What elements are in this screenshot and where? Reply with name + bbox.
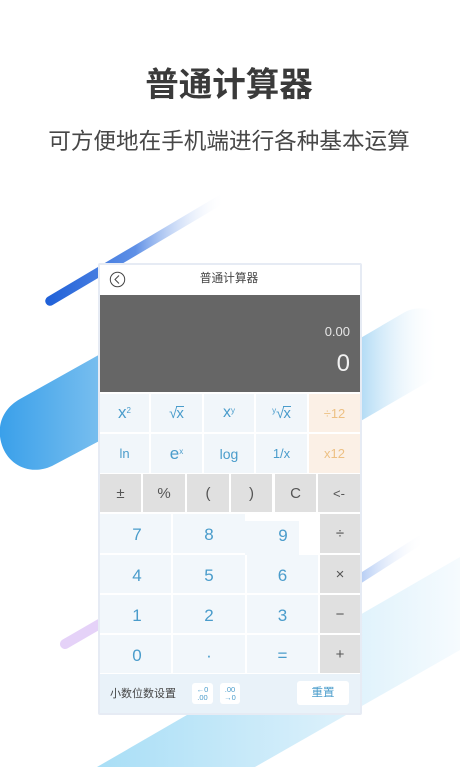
- function keys: [100, 474, 360, 512]
- panel: calculator screen: [98, 263, 362, 715]
- number keypad: 7: [132, 525, 142, 544]
- scientific keys: x: [283, 404, 291, 422]
- button: increase decimals: .00: [225, 685, 235, 694]
- subtitle: 可方便地在手机端进行各种基本运算: [48, 129, 410, 154]
- scientific keys: √: [169, 404, 177, 422]
- button: increase decimals: [220, 683, 240, 704]
- display: result value: 0: [337, 350, 350, 377]
- scientific keys: x: [176, 404, 184, 422]
- scientific keys: log: [220, 446, 238, 462]
- icon: back button: [110, 272, 126, 288]
- scientific keys: x: [179, 446, 183, 456]
- number keypad: ×: [336, 566, 344, 582]
- number keypad: 4: [132, 566, 142, 584]
- button: decrease decimals: ←0: [197, 685, 208, 694]
- display: expression value: 0.00: [325, 324, 350, 339]
- number keypad: =: [278, 646, 287, 664]
- scientific keys: x: [223, 404, 231, 421]
- scientific keys: e: [170, 444, 179, 462]
- scientific keys: ln: [119, 446, 130, 461]
- number keypad: +: [336, 646, 344, 662]
- function keys: ): [249, 484, 254, 502]
- function keys: C: [290, 484, 301, 502]
- number keypad: 9: [278, 526, 288, 545]
- number keypad: 5: [204, 566, 214, 584]
- function keys: <-: [333, 486, 345, 500]
- scientific keys: 1/x: [273, 446, 290, 461]
- scientific keys: ÷12: [324, 406, 345, 420]
- number keypad: [100, 514, 360, 673]
- number keypad: 8: [204, 525, 214, 544]
- number keypad: 1: [132, 606, 142, 624]
- scientific keys: x12: [324, 446, 345, 461]
- number keypad: 0: [132, 646, 142, 664]
- footer: decimal settings: [100, 674, 360, 713]
- title: 普通计算器: [145, 67, 313, 104]
- decimal settings label: 小数位数设置: [110, 688, 176, 700]
- button: decrease decimals: .00: [197, 693, 208, 702]
- number keypad: ÷: [336, 525, 344, 542]
- button: decrease decimals: [192, 683, 213, 704]
- button: increase decimals: →0: [224, 693, 236, 702]
- number keypad: 2: [204, 606, 214, 624]
- function keys: %: [157, 484, 171, 502]
- number keypad: −: [336, 606, 344, 622]
- scientific keys: √: [276, 404, 284, 422]
- number keypad: 3: [278, 606, 287, 624]
- display panel: [100, 295, 360, 392]
- scientific keys: x: [118, 403, 127, 422]
- function keys: ±: [116, 484, 125, 502]
- scientific keys: y: [231, 406, 235, 415]
- number keypad: ·: [206, 646, 212, 664]
- scientific keys: 2: [127, 406, 131, 415]
- button: reset: 重置: [312, 687, 334, 699]
- scientific keys: [100, 394, 360, 473]
- number keypad: 6: [278, 566, 287, 584]
- function keys: (: [206, 484, 210, 502]
- scientific keys: y: [272, 406, 276, 415]
- screen heading: 普通计算器: [200, 272, 258, 285]
- button: reset: [297, 681, 349, 705]
